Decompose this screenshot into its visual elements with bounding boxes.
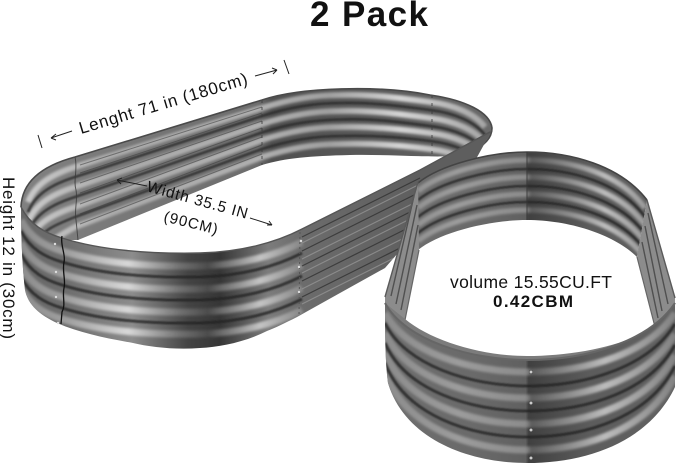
width label metric: (90CM) [162, 208, 220, 238]
length tick and arrow right [255, 60, 289, 76]
width arrow left [117, 178, 147, 186]
left bed: seam with rivets [54, 232, 302, 324]
right bed: white interior [385, 152, 675, 463]
length tick and arrow left [38, 131, 72, 148]
right bed: back wall [418, 152, 647, 258]
right bed: left side wall [385, 182, 419, 320]
volume label: volume 15.55CU.FT [450, 272, 612, 292]
width arrow right [250, 218, 272, 225]
right bed: rivets [529, 370, 533, 460]
right bed: front rim [385, 303, 675, 360]
volume value: 0.42CBM [493, 292, 573, 311]
length label: Lenght 71 in (180cm) [77, 69, 250, 138]
left raised bed [21, 89, 492, 349]
right bed: front wall [385, 303, 675, 463]
right raised bed [385, 152, 675, 463]
dimension: length [38, 60, 289, 148]
right bed: right side wall [637, 200, 675, 327]
dimension: width [117, 178, 272, 238]
width label: Width 35.5 IN [145, 178, 250, 223]
left bed: outer front wall [21, 130, 492, 349]
left bed: inner back wall [21, 89, 492, 250]
